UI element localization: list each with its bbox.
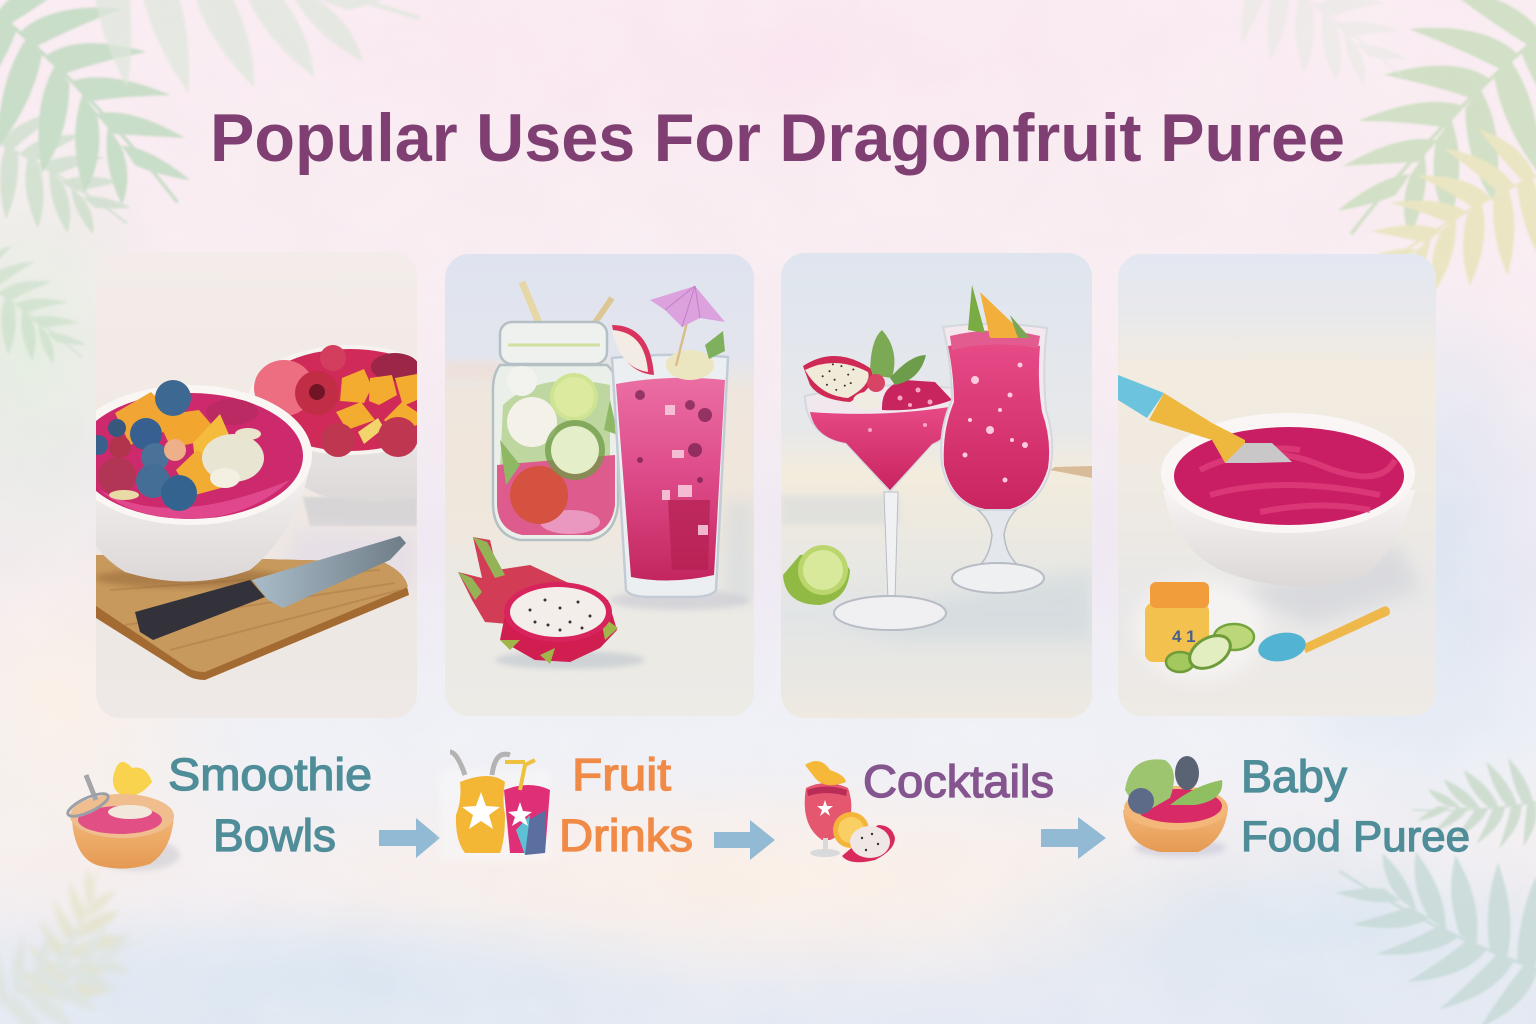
mason jar [493,322,618,540]
label group: baby food puree [1123,751,1470,861]
arrow 1 [379,818,440,858]
label: baby food puree: Food Puree [1241,813,1470,861]
label: baby food puree: Baby [1241,751,1348,802]
lime [783,545,850,605]
palm leaves: top right [1211,0,1536,312]
title: Popular Uses For Dragonfruit Puree [210,100,1345,176]
bowl [1161,413,1415,586]
label: fruit drinks: Drinks [559,810,693,861]
palm leaves: bottom left [0,866,158,1024]
knife [135,536,406,640]
label: fruit drinks: Fruit [572,749,672,800]
straws [518,280,614,322]
cutting board [96,555,409,680]
panel: baby food puree photo [1118,254,1436,716]
martini glass [803,330,951,631]
toppings [88,380,264,511]
panel: fruit drinks photo [445,254,754,716]
label: smoothie bowls [168,749,372,861]
drink garnish [612,286,725,380]
label group: smoothie bowls [65,749,372,871]
dragonfruit halves [458,537,618,664]
icon: cocktail [805,761,895,862]
label: smoothie bowls: Smoothie [168,749,372,800]
label: smoothie bowls: Bowls [213,810,336,861]
back bowl [249,345,417,498]
palm leaves: bottom right [1317,747,1536,1024]
palm leaves: top left [0,0,424,378]
teal spoon [1256,606,1390,665]
label: cocktails: Cocktails [863,756,1054,807]
panel: smoothie bowls photo [96,252,417,718]
front bowl [96,380,312,590]
label: fruit drinks [559,749,693,861]
arrow 2 [714,820,775,860]
icon: fruit drinks [440,752,550,860]
label group: fruit drinks [440,749,693,861]
tall glass [612,355,728,597]
panel: cocktails photo [781,253,1092,718]
label group: cocktails [805,756,1054,862]
label: baby food puree [1241,751,1470,861]
icon: smoothie bowl [65,762,180,871]
lime slices [1166,624,1254,675]
baby spoon in bowl [1118,375,1292,463]
hurricane glass [941,285,1052,593]
small jar: 4 1 [1172,627,1196,646]
small jar [1145,582,1209,662]
arrow 3 [1041,817,1106,859]
icon: puree bowl [1123,756,1228,857]
